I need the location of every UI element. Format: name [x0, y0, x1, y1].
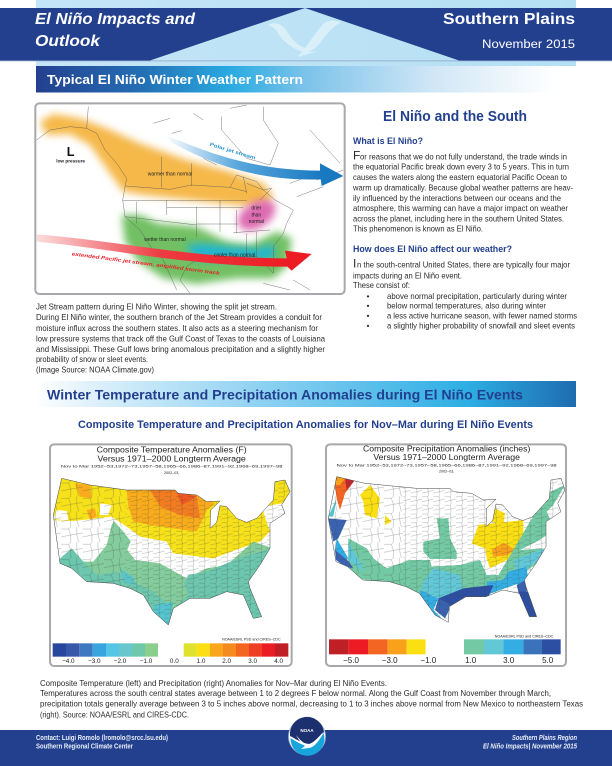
paragraph — [352, 148, 573, 233]
map outline — [53, 478, 290, 625]
bullet list: • — [366, 291, 370, 301]
icon: NOAA logo: NOAA — [300, 728, 314, 733]
panel: precipitation anomaly map — [325, 443, 567, 667]
map labels: than — [251, 212, 261, 218]
paragraph: ily influenced by the interactions between our oceans and the — [353, 193, 561, 203]
section heading bar: anomalies — [36, 381, 576, 407]
panel: jet stream map — [34, 102, 346, 295]
region and date: November 2015 — [482, 39, 575, 51]
legend: temperature scale: −1.0 — [140, 658, 153, 665]
text block: map caption: During El Niño winter, the southern branch of the Jet Stream provides a conduit for — [36, 312, 322, 322]
chart title: Composite Precipitation Anomalies (inches) — [363, 445, 531, 454]
section heading bar: typical pattern: Typical El Niño Winter Weather Pattern — [47, 72, 303, 87]
map labels: low pressure — [56, 159, 85, 164]
text block: what is El Niño — [352, 136, 573, 233]
red pacific jet stream arrow — [37, 234, 312, 271]
icon: bird swoosh — [268, 21, 341, 57]
paragraph — [353, 257, 570, 290]
paragraph: I — [353, 257, 356, 271]
legend: precipitation scale: 5.0 — [542, 656, 554, 665]
map outline — [328, 477, 565, 622]
map: precipitation regions — [328, 476, 564, 619]
map labels: wetter than normal — [144, 237, 186, 243]
panel heading: El Niño and the South: El Niño and the South — [383, 109, 527, 125]
paragraph: F — [353, 148, 360, 162]
contact details: Southern Regional Climate Center — [36, 744, 133, 750]
text block: map captions — [40, 678, 583, 720]
legend: precipitation scale: 1.0 — [465, 656, 477, 665]
paragraph: impacts during an El Niño event. — [353, 270, 462, 280]
text block: map caption: probability of snow or sleet events. — [36, 354, 148, 364]
chart title: Composite Temperature Anomalies (F) — [97, 446, 247, 455]
bullet list: above normal precipitation, particularly during winter — [387, 291, 567, 301]
legend: temperature scale: −4.0 — [62, 658, 75, 665]
paragraph: n the south-central United States, there are typically four major — [357, 260, 570, 270]
region and date — [443, 11, 575, 51]
section heading bar: typical pattern — [36, 66, 576, 92]
map labels: cooler than normal — [214, 252, 255, 258]
bullet list — [366, 291, 577, 331]
legend: precipitation scale: −1.0 — [420, 656, 437, 665]
credit: NOAA/ESRL PSD and CIRES–CDC — [222, 638, 281, 642]
chart title: Nov to Mar 1952–53,1972–73,1957–58,1965–66,1986–87,1991–92,1968–69,1997–98 — [61, 465, 283, 469]
cooler than normal region — [185, 243, 275, 261]
credit: NOAA/ESRL PSD and CIRES–CDC — [495, 634, 554, 638]
legend: temperature scale: 1.0 — [197, 658, 206, 665]
legend: precipitation scale: −3.0 — [382, 656, 398, 665]
legend: temperature scale: 4.0 — [274, 658, 284, 665]
map: temperature regions — [54, 478, 290, 625]
chart title: Nov to Mar 1952–53,1972–73,1957–58,1965–66,1986–87,1991–92,1968–69,1997–98 — [337, 463, 557, 467]
map labels — [56, 142, 264, 277]
footer credit: El Niño Impacts| November 2015 — [483, 744, 577, 750]
text block: map caption: low pressure systems that track off the Gulf Coast of Texas to the coasts of Louisiana — [36, 334, 325, 344]
map labels: drier — [251, 206, 262, 212]
paragraph: or reasons that we do not fully understand, the trade winds in — [360, 152, 567, 162]
chart title — [337, 445, 557, 474]
text block: map caption: (Image Source: NOAA Climate.gov) — [36, 364, 154, 374]
blue polar jet stream arrow — [165, 135, 343, 186]
region and date: Southern Plains — [443, 11, 575, 28]
bullet list: • — [366, 311, 370, 321]
drier than normal region — [232, 193, 281, 237]
paragraph: atmosphere, this warming can have a major impact on weather — [353, 203, 568, 213]
legend: temperature scale: 2.0 — [222, 658, 232, 665]
subheading: What is El Niño? — [353, 136, 423, 147]
chart title: Versus 1971–2000 Longterm Average — [98, 454, 246, 463]
map labels: warmer than normal — [148, 172, 192, 178]
map labels: L — [67, 145, 75, 159]
warmer than normal region — [40, 114, 273, 206]
legend: temperature scale: 3.0 — [248, 658, 258, 665]
paragraph: These consist of: — [353, 280, 410, 290]
bullet list: • — [366, 321, 370, 331]
map labels: normal — [249, 219, 264, 225]
chart title — [61, 446, 282, 475]
paragraph: the equatorial Pacific break down every 3 to 5 years. This in turn — [353, 162, 569, 172]
legend: temperature scale: 0.0 — [170, 658, 179, 665]
legend: precipitation scale — [329, 639, 561, 665]
title: Outlook — [35, 33, 102, 50]
chart title: 2002–03, — [164, 471, 179, 475]
chart title: 2002–03, — [439, 470, 454, 474]
section heading bar: anomalies: Winter Temperature and Precipitation Anomalies during El Niño Events — [47, 386, 523, 402]
title: El Niño Impacts and — [35, 11, 196, 28]
contact details: Contact: Luigi Romolo (lromolo@srcc.lsu.edu) — [36, 735, 168, 742]
text block: map captions: Temperatures across the south central states average between 1 to 2 degrees F below normal. Along the Gulf Coast from November through March, — [40, 688, 551, 698]
chart title: Versus 1971–2000 Longterm Average — [373, 453, 521, 462]
title — [35, 11, 196, 50]
footer credit: Southern Plains Region — [512, 735, 577, 742]
map labels: extended Pacific jet stream, amplified storm track — [71, 251, 220, 277]
wetter than normal region — [122, 215, 292, 284]
bullet list: below normal temperatures, also during winter — [387, 301, 546, 311]
legend: temperature scale — [53, 643, 288, 665]
paragraph: warm up dramatically. Because global weather patterns are heav- — [352, 183, 573, 193]
paragraph: across the planet, including here in the southern United States. — [353, 214, 564, 224]
text block: map captions: (right). Source: NOAA/ESRL and CIRES-CDC. — [40, 710, 189, 720]
header banner — [0, 0, 612, 66]
light blue header panel — [36, 0, 576, 66]
legend: temperature scale: −3.0 — [88, 658, 101, 665]
text block: map caption: moisture influx across the southern states. It also acts as a steering mechanism for — [36, 323, 318, 333]
panel: temperature anomaly map — [49, 443, 293, 667]
text block: map caption: and Mississippi. These Gulf lows bring anomalous precipitation and a slightly higher — [36, 344, 325, 354]
bullet list: a less active hurricane season, with fewer named storms — [387, 311, 577, 321]
footer credit — [483, 735, 577, 750]
bullet list: a slightly higher probability of snowfall and sleet events — [387, 321, 575, 331]
legend: precipitation scale: −5.0 — [343, 656, 359, 665]
coast and border lines — [37, 105, 343, 293]
subheading: How does El Niño affect our weather? — [353, 244, 512, 255]
legend: temperature scale: −2.0 — [114, 658, 127, 665]
map labels: Polar jet stream — [209, 142, 257, 162]
text block: how does El Niño affect our weather — [353, 244, 577, 331]
legend: precipitation scale: 3.0 — [503, 656, 515, 665]
subheading: composite anomalies: Composite Temperature and Precipitation Anomalies for Nov–Mar during El Niño Events — [78, 419, 533, 431]
icon: NOAA logo — [288, 717, 326, 756]
dark blue header band with triangular cut-out — [0, 8, 612, 60]
text block: map captions: Composite Temperature (left) and Precipitation (right) Anomalies for Nov–Mar during El Niño Events. — [40, 678, 387, 688]
bullet list: • — [366, 301, 370, 311]
paragraph: This phenomenon is known as El Niño. — [353, 223, 483, 233]
contact details — [36, 735, 168, 750]
footer band — [0, 730, 612, 766]
text block: map caption: Jet Stream pattern during El Niño Winter, showing the split jet stream. — [36, 302, 277, 312]
text block: map caption — [36, 302, 325, 374]
paragraph: causes the waters along the eastern equatorial Pacific Ocean to — [353, 172, 567, 182]
